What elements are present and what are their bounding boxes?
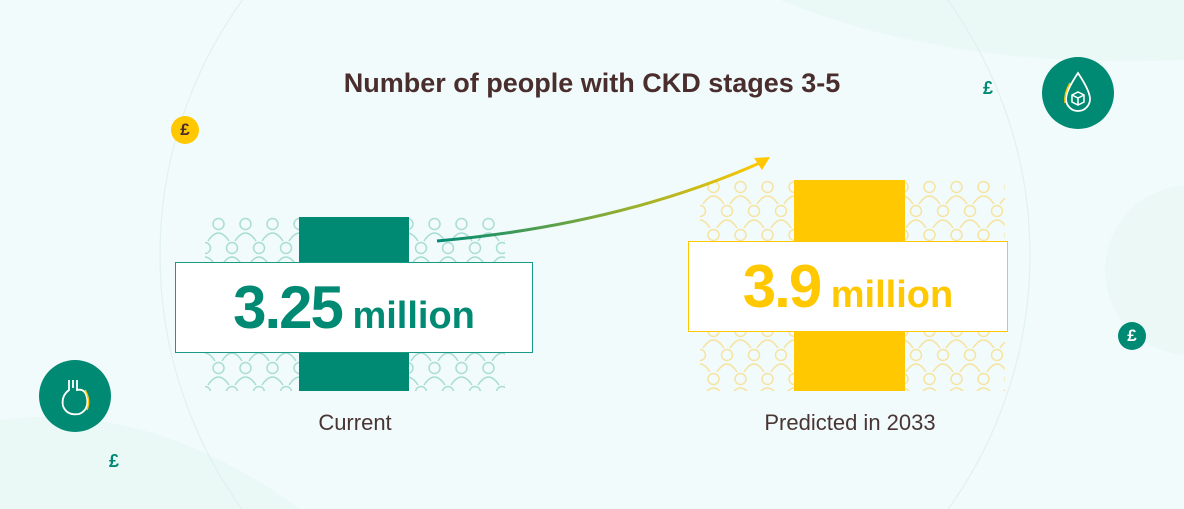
- value box: predicted: [688, 241, 1008, 332]
- icon: drop: [1042, 57, 1114, 129]
- value box: current: [175, 262, 533, 353]
- label: current: Current: [318, 410, 392, 435]
- label: predicted: Predicted in 2033: [764, 410, 936, 435]
- icon: yellow pound: £: [180, 120, 190, 139]
- icon: teal pound: [1118, 322, 1146, 350]
- icon: yellow pound: [171, 116, 199, 144]
- icon: pound text top: £: [983, 78, 993, 98]
- icon: heart: [39, 360, 111, 432]
- value box: predicted: 3.9 million: [743, 253, 953, 320]
- people pattern right: [700, 180, 1005, 391]
- bar: current: [299, 217, 409, 391]
- icon: teal pound: £: [1127, 326, 1137, 345]
- bar: predicted: [794, 180, 905, 391]
- icon: pound text bottom: £: [109, 451, 119, 471]
- people pattern left: [205, 217, 505, 391]
- title: Number of people with CKD stages 3-5: [344, 68, 840, 98]
- value box: current: 3.25 million: [233, 274, 475, 341]
